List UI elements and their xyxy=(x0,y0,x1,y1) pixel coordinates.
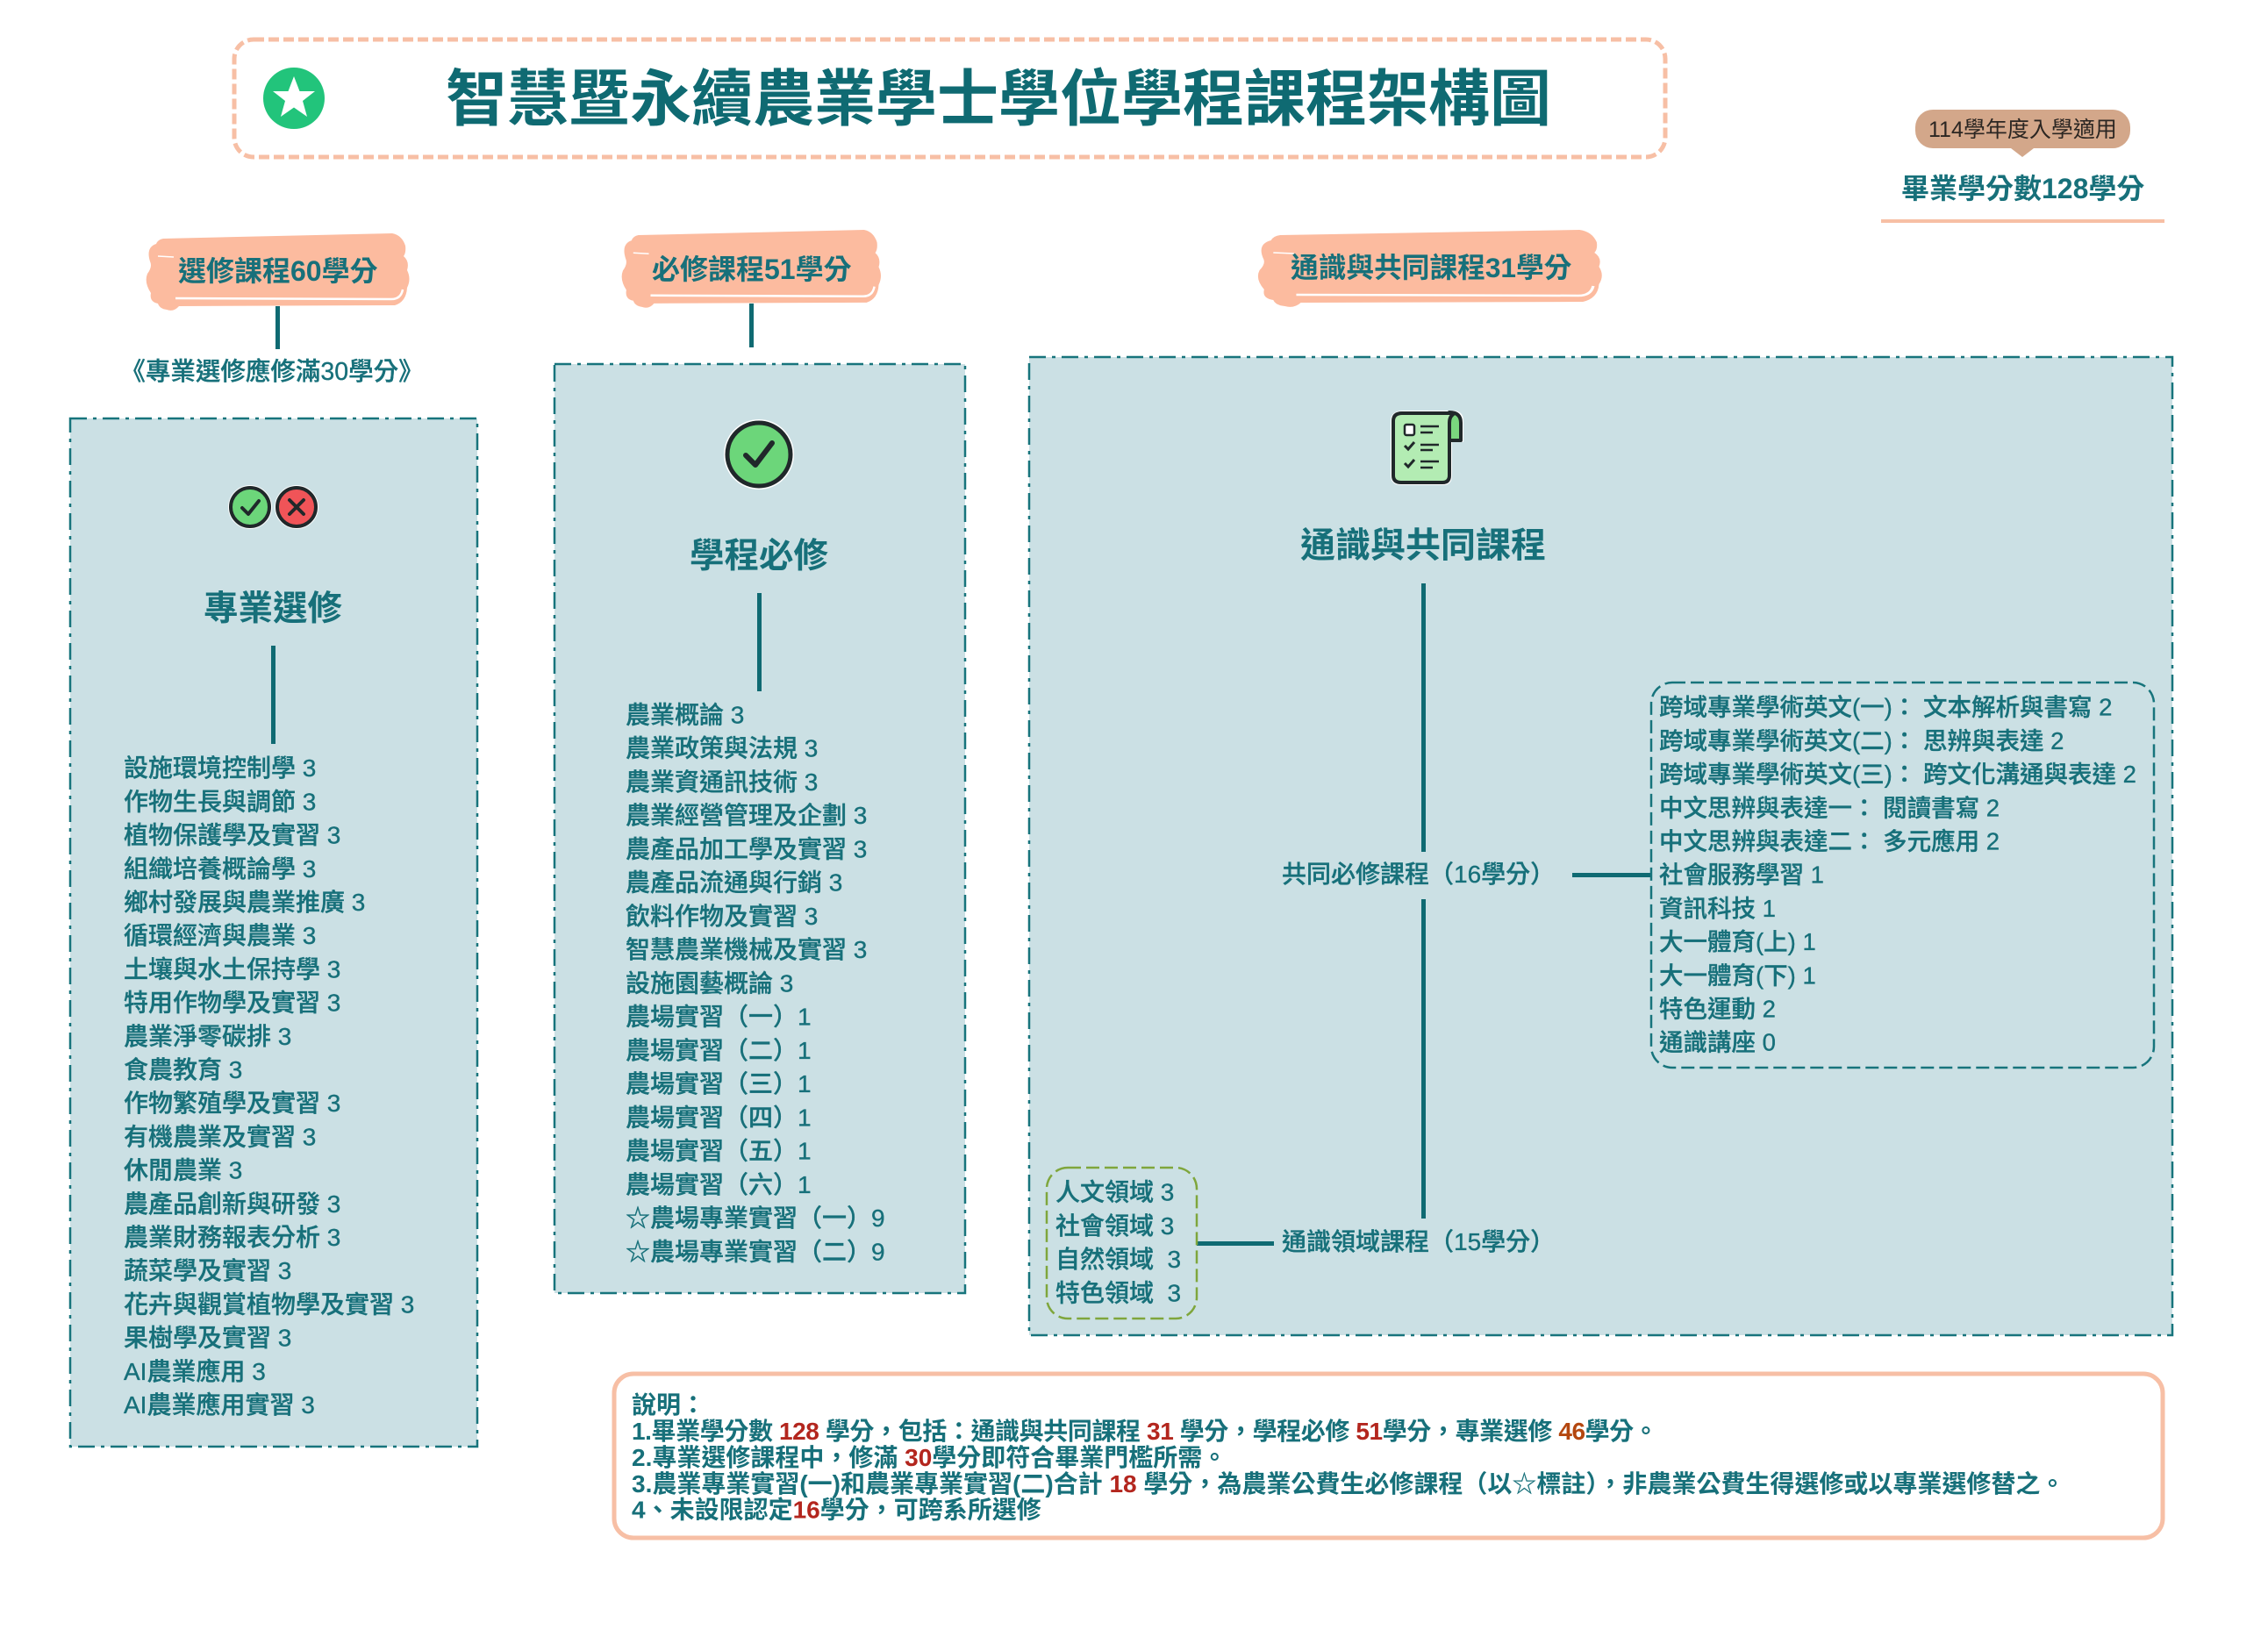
course list: 農業經營管理及企劃 3 xyxy=(626,802,867,829)
course list: 農產品創新與研發 3 xyxy=(124,1190,340,1218)
connector: elective heading to note xyxy=(275,306,280,349)
panel: program required courses xyxy=(0,364,965,1293)
course list: 休閒農業 3 xyxy=(124,1157,242,1184)
course list: 農業政策與法規 3 xyxy=(626,735,818,761)
icon: check and cross xyxy=(228,485,318,529)
course list: 農場實習（四）1 xyxy=(626,1104,812,1131)
course list: 花卉與觀賞植物學及實習 3 xyxy=(124,1290,414,1318)
box: common required courses: 跨域專業學術英文(二)： 思辨與表達 2 xyxy=(1659,727,2064,754)
course list: 組織培養概論學 3 xyxy=(124,855,316,883)
box: general domain courses: 自然領域 3 xyxy=(1055,1246,1181,1273)
connector: upper trunk xyxy=(1421,583,1426,852)
panel: professional electives xyxy=(0,418,477,1447)
course list: 鄉村發展與農業推廣 3 xyxy=(124,889,365,916)
course list: 農業淨零碳排 3 xyxy=(124,1023,291,1050)
course list: 特用作物學及實習 3 xyxy=(124,990,340,1017)
box: common required courses: 社會服務學習 1 xyxy=(1659,861,1824,889)
course list: 設施環境控制學 3 xyxy=(124,754,316,782)
course list: 果樹學及實習 3 xyxy=(124,1325,291,1352)
panel: explanatory notes: 2.專業選修課程中，修滿 30學分即符合畢業門檻所需。 xyxy=(632,1444,1227,1471)
common required label: 共同必修課程（16學分） xyxy=(1282,861,1555,888)
general domain label: 通識領域課程（15學分） xyxy=(1282,1228,1555,1255)
course list: 蔬菜學及實習 3 xyxy=(124,1257,291,1284)
box: general domain courses: 社會領域 3 xyxy=(1055,1212,1174,1240)
course list: 飲料作物及實習 3 xyxy=(626,903,818,930)
title: 智慧暨永續農業學士學位學程課程架構圖 xyxy=(446,65,1551,133)
course list: 農產品加工學及實習 3 xyxy=(626,835,867,862)
elective requirement note: 《專業選修應修滿30學分》 xyxy=(120,358,424,386)
heading: elective credits: 選修課程60學分 xyxy=(178,255,378,287)
course list: ☆農場專業實習（二）9 xyxy=(626,1238,885,1265)
panel: explanatory notes: 3.農業專業實習(一)和農業專業實習(二)合計 18 學分，為農業公費生必修課程（以☆標註），非農業公費生得選修或以專業選修替之。 xyxy=(632,1470,2064,1497)
icon: checklist document xyxy=(1391,411,1463,485)
icon: check xyxy=(724,419,794,490)
box: common required courses: 中文思辨與表達二： 多元應用 2 xyxy=(1659,828,2000,854)
course list: 農場實習（一）1 xyxy=(626,1004,812,1030)
icon: star badge xyxy=(263,68,325,129)
course list: 農場實習（二）1 xyxy=(626,1037,812,1064)
callout: intake year badge xyxy=(1915,110,2130,157)
heading: required credits xyxy=(622,230,881,308)
panel: general education and common courses xyxy=(0,357,2183,1335)
box: common required courses: 跨域專業學術英文(一)： 文本解析與書寫 2 xyxy=(1659,694,2112,721)
connector xyxy=(757,593,762,691)
course list: 有機農業及實習 3 xyxy=(124,1123,316,1150)
course list: 作物生長與調節 3 xyxy=(124,788,316,815)
course list: 智慧農業機械及實習 3 xyxy=(626,936,867,963)
box: common required courses xyxy=(0,660,2183,1068)
course list: 農產品流通與行銷 3 xyxy=(626,868,842,897)
heading: general education credits: 通識與共同課程31學分 xyxy=(1291,252,1572,283)
connector: lower trunk xyxy=(1421,899,1426,1219)
box: common required courses: 特色運動 2 xyxy=(1659,995,1776,1023)
connector: common required branch xyxy=(1572,873,1651,877)
title banner xyxy=(234,39,1665,157)
panel heading: 學程必修 xyxy=(690,537,828,575)
graduation credits heading xyxy=(1881,173,2164,223)
box: common required courses: 中文思辨與表達一： 閱讀書寫 2 xyxy=(1659,794,2000,821)
heading: elective credits xyxy=(147,233,409,311)
course list: 作物繁殖學及實習 3 xyxy=(124,1090,340,1117)
course list: ☆農場專業實習（一）9 xyxy=(626,1204,885,1232)
course list: 循環經濟與農業 3 xyxy=(124,922,316,949)
box: general domain courses xyxy=(0,1145,1229,1319)
box: common required courses: 通識講座 0 xyxy=(1659,1029,1776,1056)
panel: explanatory notes xyxy=(0,1365,2163,1538)
box: common required courses: 資訊科技 1 xyxy=(1659,895,1776,922)
course list: 農業概論 3 xyxy=(626,701,744,728)
graduation credits heading: 畢業學分數128學分 xyxy=(1901,173,2144,204)
box: common required courses: 大一體育(下) 1 xyxy=(1659,961,1816,989)
connector xyxy=(271,646,275,744)
course list: 農業資通訊技術 3 xyxy=(626,768,818,796)
panel heading: 專業選修 xyxy=(204,590,342,628)
heading: general education credits xyxy=(1258,230,1602,307)
course list: 農業財務報表分析 3 xyxy=(124,1224,340,1251)
course list: AI農業應用 3 xyxy=(124,1358,266,1385)
panel: explanatory notes: 4、未設限認定16學分，可跨系所選修 xyxy=(632,1497,1041,1523)
panel: explanatory notes: 說明： xyxy=(632,1391,705,1419)
connector: required heading to panel xyxy=(749,304,754,347)
box: common required courses: 跨域專業學術英文(三)： 跨文化溝通與表達 2 xyxy=(1659,761,2136,788)
course list: 農場實習（六）1 xyxy=(626,1171,812,1198)
course list: AI農業應用實習 3 xyxy=(124,1391,315,1419)
connector: general domain branch xyxy=(1197,1241,1274,1246)
course list: 土壤與水土保持學 3 xyxy=(124,955,340,983)
course list: 食農教育 3 xyxy=(124,1056,242,1083)
box: general domain courses: 人文領域 3 xyxy=(1055,1179,1174,1205)
course list: 植物保護學及實習 3 xyxy=(124,822,340,849)
course list: 農場實習（五）1 xyxy=(626,1137,812,1165)
course list: 農場實習（三）1 xyxy=(626,1070,812,1097)
heading: required credits: 必修課程51學分 xyxy=(652,254,852,285)
panel: explanatory notes: 1.畢業學分數 128 學分，包括：通識與共同課程 31 學分，學程必修 51學分，專業選修 46學分。 xyxy=(632,1418,1657,1445)
course list: 設施園藝概論 3 xyxy=(626,969,793,997)
callout: intake year badge: 114學年度入學適用 xyxy=(1928,118,2117,142)
box: common required courses: 大一體育(上) 1 xyxy=(1659,928,1816,955)
panel heading: 通識與共同課程 xyxy=(1300,526,1546,565)
box: general domain courses: 特色領域 3 xyxy=(1055,1279,1181,1306)
